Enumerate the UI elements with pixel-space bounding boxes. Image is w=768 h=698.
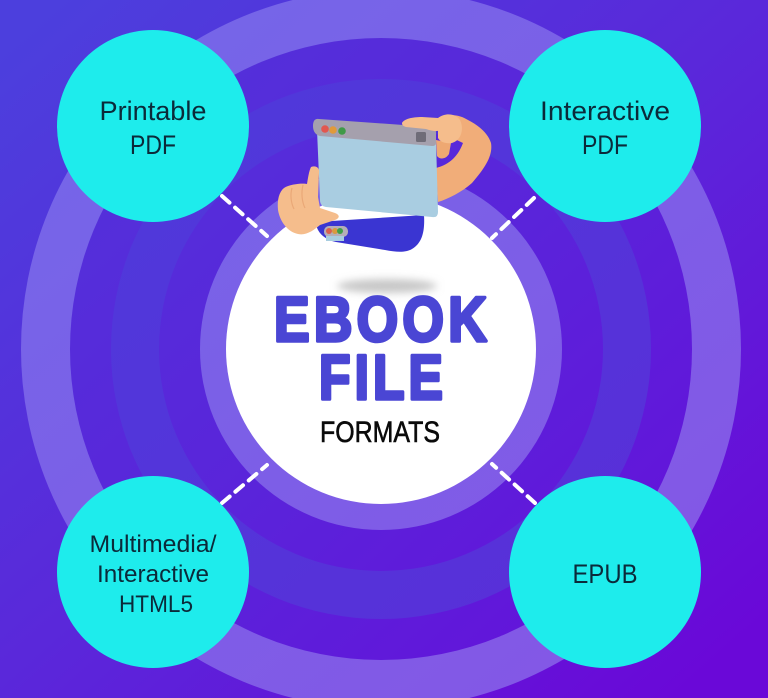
- node: EPUB: [509, 476, 701, 668]
- node: EPUB: EPUB: [572, 559, 638, 589]
- browser window body: [317, 130, 438, 217]
- left hand finger shading: [291, 185, 305, 209]
- node: Multimedia/Interactive HTML5: Interactive: [97, 561, 209, 588]
- shadow under illustration: [337, 279, 437, 293]
- node: Interactive PDF: PDF: [582, 130, 628, 160]
- right hand knuckles: [438, 114, 462, 143]
- subtitle: FORMATS: FORMATS: [320, 416, 440, 449]
- dashed connector: top left: [222, 196, 267, 236]
- left hand: [278, 166, 339, 234]
- browser window title bar: [313, 119, 436, 146]
- right arm: [436, 115, 491, 202]
- title: EBOOK FILE: FILE: [319, 343, 447, 413]
- illustration: hands holding browser window: [278, 114, 491, 252]
- dashed connector: bottom left: [222, 465, 267, 503]
- window control dots: [321, 125, 346, 135]
- small toolbar on phone: [324, 226, 348, 241]
- node: Printable PDF: [57, 30, 249, 222]
- node: Interactive PDF: Interactive: [540, 96, 670, 126]
- node: Printable PDF: PDF: [130, 130, 176, 160]
- phone body: [316, 215, 424, 252]
- title: EBOOK FILE: EBOOK: [274, 285, 491, 355]
- node: Multimedia/Interactive HTML5: HTML5: [119, 591, 193, 618]
- dashed connector: bottom right: [492, 464, 535, 503]
- title: EBOOK FILE: [274, 285, 491, 413]
- right hand thumb: [436, 140, 451, 158]
- right hand finger: [402, 117, 443, 131]
- node: Multimedia/Interactive HTML5: Multimedia/: [90, 531, 217, 558]
- node: Multimedia/Interactive HTML5: [57, 476, 249, 668]
- window menu icon: [416, 132, 426, 142]
- node: Interactive PDF: [509, 30, 701, 222]
- center white circle: [226, 194, 536, 504]
- node: Printable PDF: Printable: [100, 96, 206, 126]
- dashed connector: top right: [492, 198, 534, 238]
